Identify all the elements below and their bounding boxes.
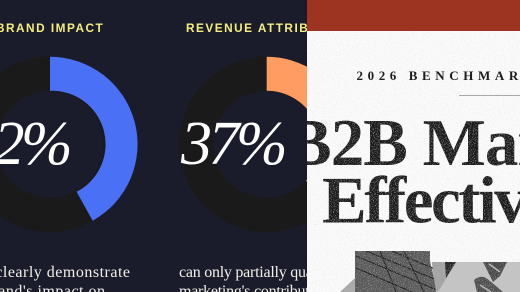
text block: revenue attribution description: can only partially quantify: [179, 264, 342, 281]
collage image: [340, 251, 520, 292]
paper texture: [307, 31, 520, 292]
donut chart: revenue attribution 37%: [196, 57, 354, 215]
divider rule: [459, 95, 520, 96]
panel: report cover: [287, 0, 520, 292]
panel: dark statistics slide: [0, 24, 307, 292]
donut chart: brand impact 42%: [0, 57, 138, 221]
heading: revenue attribution: REVENUE ATTRIBUTION: [186, 21, 353, 35]
stat: 37%: 37%: [180, 110, 285, 178]
header band: [307, 0, 520, 31]
title: [307, 120, 520, 223]
